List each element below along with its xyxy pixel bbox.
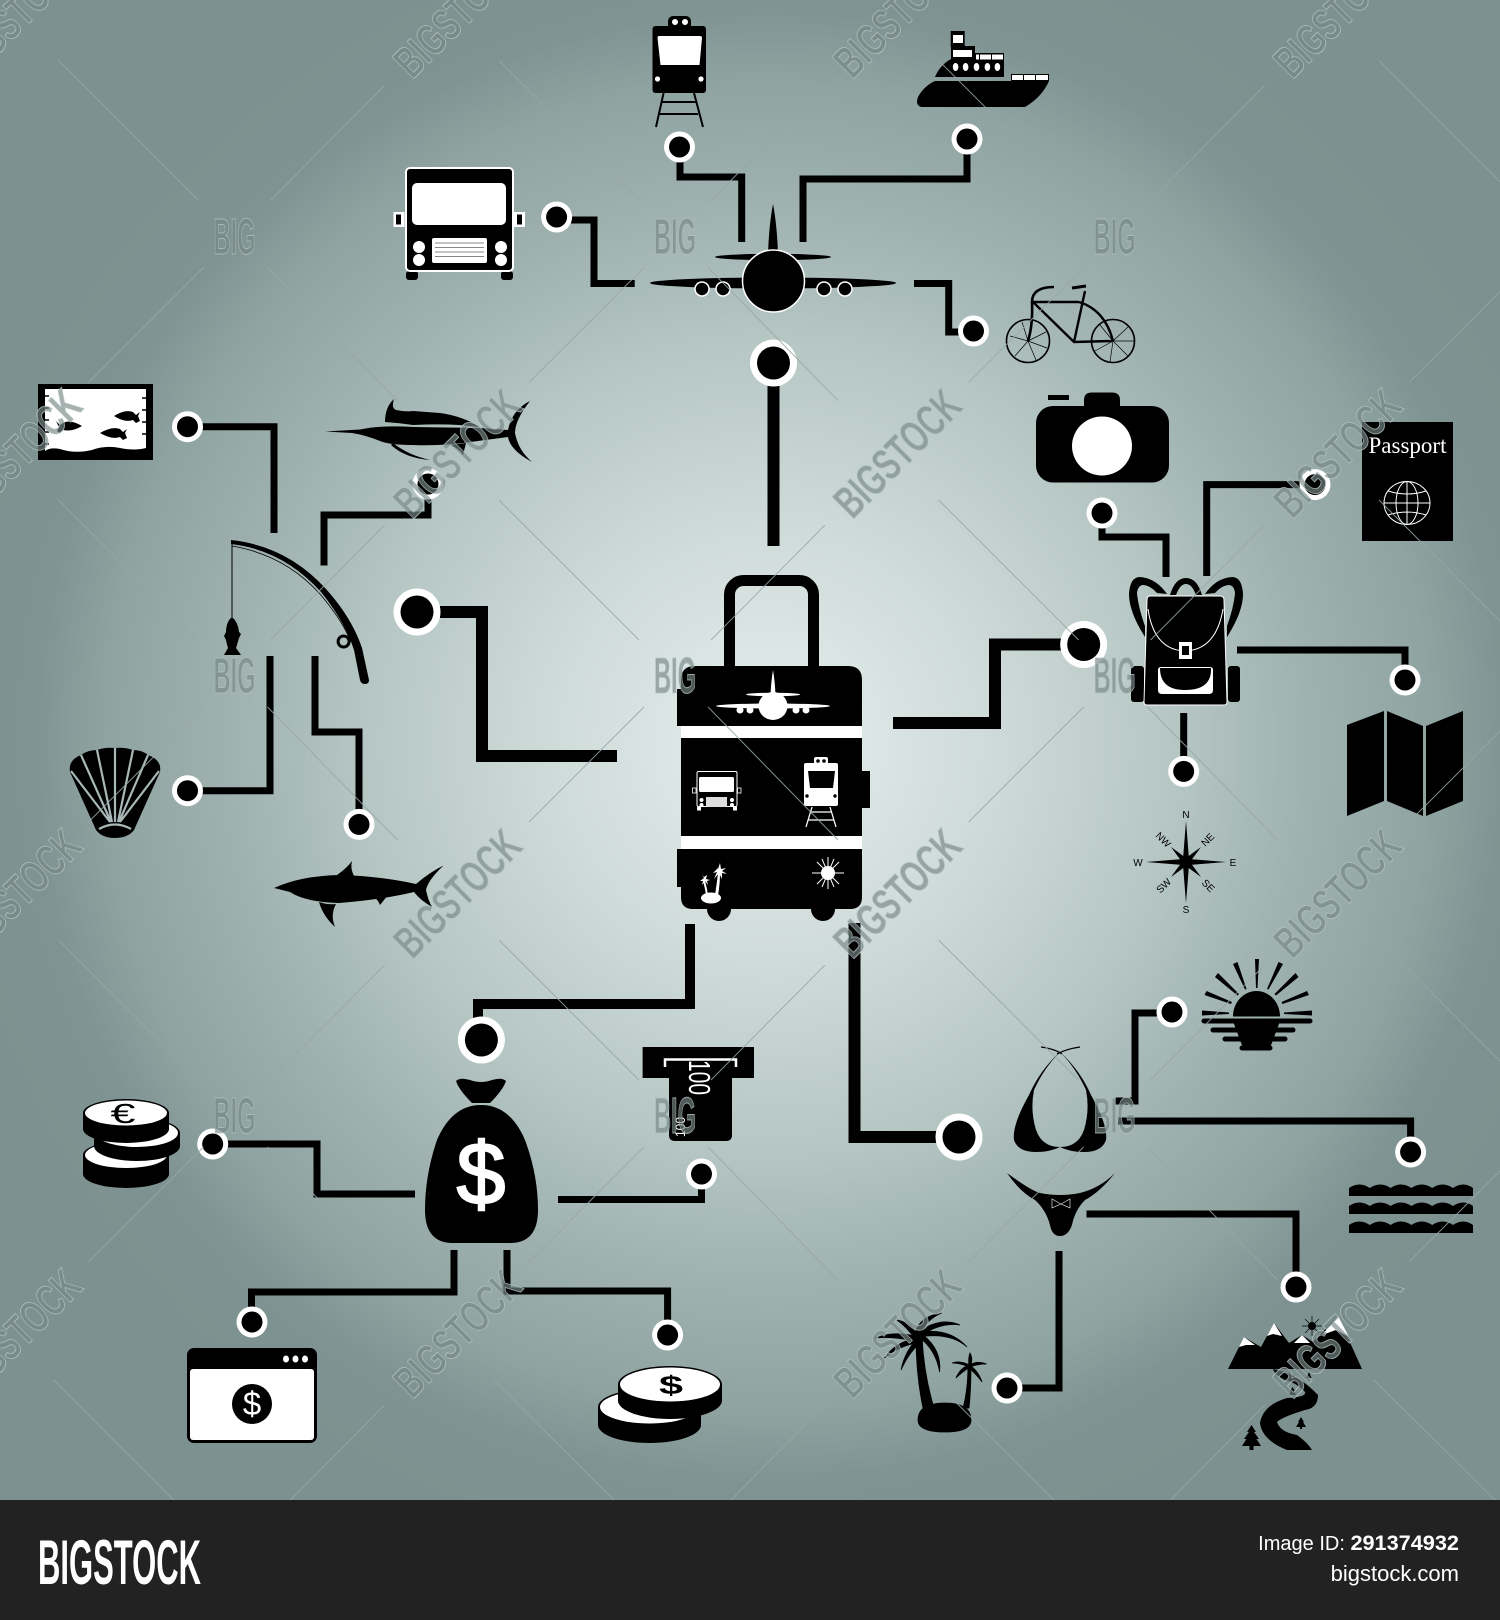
watermark: BIGSTOCK diagonal labels: BIGSTOCK [823, 819, 971, 967]
icon: compass rose: NE [1200, 831, 1217, 849]
connector: train [664, 132, 742, 242]
icon: truck [394, 168, 525, 280]
watermark: BIG labels: BIG [654, 1087, 696, 1144]
connector: marlin [324, 468, 444, 566]
icon: compass rose: N [1182, 810, 1190, 821]
watermark: BIG labels [214, 208, 1136, 1144]
connector: suitcase to beach [854, 923, 982, 1160]
icon: compass rose [1133, 810, 1237, 916]
icon: sea waves [1349, 1184, 1473, 1233]
watermark: BIG labels: BIG [214, 208, 256, 265]
watermark: BIGSTOCK diagonal labels: BIGSTOCK [823, 379, 971, 527]
icon: compass rose: W [1133, 858, 1143, 869]
connector: palm [992, 1251, 1059, 1404]
icon: bicycle [1006, 286, 1134, 362]
watermark: BIG labels: BIG [214, 1087, 256, 1144]
watermark: BIG labels: BIG [654, 647, 696, 704]
icon: suitcase [677, 580, 870, 921]
icon: train [652, 16, 706, 127]
connector: truck [541, 202, 635, 284]
icon: backpack [1129, 577, 1243, 705]
connector: mountains [1086, 1214, 1312, 1302]
connector: euro coins [197, 1128, 415, 1194]
icon: money bag: $ [457, 1124, 505, 1223]
connector: compass [1168, 713, 1199, 787]
footer site: bigstock.com [1331, 1561, 1459, 1586]
icon: money bag [425, 1079, 538, 1243]
footer image id: Image ID: 291374932 [1258, 1530, 1459, 1555]
icon: online payment window [187, 1348, 317, 1443]
icon: suitcase palm sticker [700, 863, 727, 904]
panel: beach [876, 959, 1473, 1450]
watermark: BIGSTOCK diagonal labels: BIGSTOCK [1263, 1259, 1411, 1407]
connector: suitcase to fishing [394, 588, 617, 756]
panel: fishing [38, 384, 532, 927]
icon: ATM cash slot: 100 [673, 1117, 688, 1137]
panel: travel gear [1036, 392, 1463, 916]
connector: passport [1207, 469, 1330, 576]
icon: marlin [325, 399, 532, 462]
icon: suitcase train sticker [804, 757, 838, 827]
connector: shark [315, 656, 374, 840]
icon: bikini top [1014, 1047, 1106, 1152]
icon: compass rose: SW [1155, 876, 1174, 896]
connector: suitcase to backpack [893, 621, 1107, 723]
icon: euro coins [83, 1098, 180, 1188]
watermark: BIGSTOCK diagonal labels: BIGSTOCK [1263, 819, 1411, 967]
icon: ATM cash slot [643, 1047, 754, 1141]
watermark: BIGSTOCK diagonal labels: BIGSTOCK [383, 379, 531, 527]
connector: suitcase to transport [750, 340, 797, 546]
icon: map [1347, 711, 1463, 816]
icon: bikini bottom [1007, 1173, 1115, 1236]
icon: suitcase sun sticker [812, 857, 844, 889]
connector: map [1237, 650, 1420, 696]
watermark: BIG labels: BIG [214, 647, 256, 704]
panel: suitcase hub [677, 580, 870, 921]
icon: fishing rod [224, 540, 369, 684]
icon: online payment window: $ [243, 1385, 261, 1422]
icon: seashell [70, 748, 160, 838]
infographic canvas: BIG [1094, 208, 1136, 265]
watermark: BIG labels: BIG [654, 208, 696, 265]
connector: dollar coins [507, 1250, 683, 1350]
icon: palm trees on island [876, 1313, 986, 1432]
connector: online payment [236, 1250, 454, 1338]
connector: aquarium [172, 411, 274, 533]
icon: euro coins: € [111, 1098, 136, 1129]
icon: sunset [1202, 959, 1312, 1048]
icon: aquarium [38, 384, 153, 460]
connector: seashell [172, 656, 270, 806]
icon: suitcase truck sticker [692, 772, 741, 810]
icon: compass rose: E [1230, 858, 1237, 869]
panel: transport [394, 16, 1134, 362]
footer bar [0, 1500, 1500, 1620]
icon: passport: Passport [1369, 433, 1447, 458]
icon: suitcase plane sticker [716, 670, 830, 720]
icon: dollar coins [598, 1366, 722, 1443]
connector: ATM [558, 1158, 717, 1200]
watermark: BIGSTOCK diagonal labels: BIGSTOCK [823, 1259, 971, 1407]
icon: compass rose: S [1183, 905, 1190, 916]
footer bar: BIGSTOCK [38, 1528, 201, 1598]
infographic canvas: BIG [1094, 1087, 1136, 1144]
connector: ship [803, 124, 982, 242]
connector: bicycle [914, 284, 989, 346]
watermark: BIGSTOCK diagonal labels: BIGSTOCK [1263, 379, 1411, 527]
icon: compass rose: NW [1153, 831, 1173, 851]
icon: mountains and river [1228, 1316, 1362, 1450]
watermark: BIGSTOCK diagonal labels: BIGSTOCK [383, 1259, 531, 1407]
icon: ATM cash slot: 100 [682, 1060, 717, 1095]
infographic canvas: BIG [1094, 647, 1136, 704]
icon: ship [917, 31, 1049, 107]
icon: camera [1036, 392, 1169, 482]
icon: airplane [650, 204, 896, 312]
connector: sunset [1115, 996, 1188, 1101]
connector: suitcase to money [458, 924, 690, 1064]
watermark: BIGSTOCK diagonal labels: BIGSTOCK [383, 819, 531, 967]
connector: sea waves [1118, 1121, 1426, 1168]
icon: dollar coins: $ [659, 1371, 683, 1400]
icon: passport [1362, 422, 1453, 541]
icon: compass rose: SE [1199, 878, 1216, 895]
icon: shark [274, 861, 444, 927]
connector: camera [1086, 498, 1166, 577]
panel: money [83, 1047, 754, 1443]
